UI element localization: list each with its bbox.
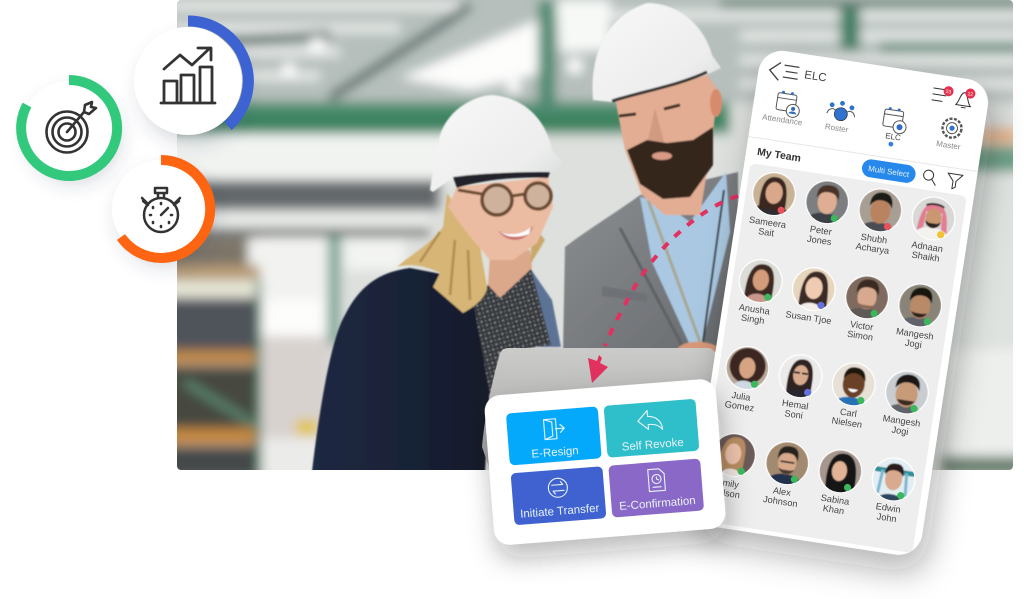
avatar: Emily Wilson — [720, 433, 756, 498]
avatar: Mangesh Jogi second: Jogi — [891, 425, 909, 437]
avatar: Hemal Soni — [778, 354, 822, 419]
button: E-Resign — [506, 406, 602, 465]
avatar: Victor Simon: Simon — [847, 329, 874, 343]
avatar: Sameera Sait — [749, 172, 796, 236]
avatar: Sabina Khan: Sabina — [820, 493, 851, 507]
avatar: Sameera Sait: Sait — [758, 226, 775, 238]
avatar: Julia Gomez: Gomez — [724, 399, 755, 413]
tab: Master — [936, 117, 965, 152]
avatar: Mangesh Jogi second: Mangesh — [882, 413, 921, 429]
avatar: Emily Wilson: Emily — [716, 477, 740, 490]
icon: filter — [946, 173, 963, 190]
icon: stopwatch — [142, 188, 180, 232]
button: Multi Select — [861, 158, 917, 184]
ring icon: stopwatch — [112, 160, 210, 258]
avatar: Peter Jones — [805, 180, 849, 245]
avatar: Carl Nielsen — [832, 362, 876, 428]
avatar: Alex Johnson: Johnson — [762, 494, 798, 509]
avatar: Anusha Singh: Singh — [740, 313, 765, 326]
avatar: Sameera Sait: Sameera — [748, 215, 788, 230]
ring icon: growth chart — [134, 21, 248, 135]
button: E-Confirmation — [608, 459, 704, 518]
avatar: Edwin John — [872, 458, 916, 522]
avatar: Carl Nielsen: Nielsen — [831, 415, 863, 430]
avatar: Anusha Singh: Anusha — [738, 302, 771, 317]
avatar: Emily Wilson: Wilson — [712, 486, 741, 500]
avatar: Carl Nielsen: Carl — [839, 407, 857, 419]
tab: Roster: Roster — [824, 122, 849, 135]
button: Self Revoke: Self Revoke — [621, 437, 684, 454]
photo background: blurred warehouse — [160, 0, 1024, 490]
photo: man in hard hat — [563, 3, 738, 352]
icon: back arrow — [637, 409, 663, 431]
photo: factory managers with hard hats — [160, 0, 1024, 490]
button: Multi Select: Multi Select — [868, 164, 911, 179]
phone header: back, menu, title: ELC — [803, 69, 827, 85]
avatar: Shubh Acharya: Shubh — [860, 232, 888, 246]
avatar: Susan Tjoe: Susan Tjoe — [785, 309, 832, 326]
avatar: Shubh Acharya: Acharya — [855, 241, 891, 256]
icon: swap arrows — [548, 478, 568, 498]
button: Initiate Transfer: Initiate Transfer — [520, 503, 600, 521]
avatar: Sabina Khan — [818, 450, 862, 514]
icon: bar chart with arrow — [161, 48, 215, 103]
tab: Master: Master — [936, 139, 961, 152]
avatar: Adnaan Shaikh: Shaikh — [911, 250, 940, 264]
avatar: Shubh Acharya — [856, 188, 902, 255]
avatar: Peter Jones: Jones — [806, 234, 833, 247]
notification icons with badges — [932, 83, 976, 109]
avatar: Hemal Soni: Hemal — [781, 398, 809, 412]
avatar: Edwin John: John — [876, 511, 897, 524]
avatar: Anusha Singh — [738, 259, 782, 325]
avatar: Julia Gomez: Julia — [731, 390, 752, 403]
avatar: Mangesh Jogi: Mangesh — [895, 326, 934, 342]
button: Self Revoke — [604, 399, 699, 458]
avatar: Mangesh Jogi second — [883, 370, 929, 436]
ring icon: target — [21, 80, 117, 176]
tab: Attendance: Attendance — [762, 112, 804, 127]
tab: Attendance — [762, 88, 807, 127]
avatar: Edwin John: Edwin — [875, 501, 901, 515]
phone: ELC app team screen — [689, 48, 991, 558]
dashed arrow from phone to action card — [588, 196, 738, 383]
icon: search — [922, 169, 937, 185]
tab: ELC active: ELC — [885, 131, 902, 143]
tab: Roster — [824, 99, 857, 135]
avatar: Hemal Soni: Soni — [784, 408, 804, 421]
avatar: Victor Simon — [845, 276, 889, 340]
avatar: Julia Gomez — [725, 346, 770, 412]
card: employee actions — [483, 378, 727, 546]
avatar: Alex Johnson: Alex — [772, 485, 792, 498]
icon: door exit — [543, 418, 565, 440]
notification icons with badges: 12 — [967, 91, 974, 98]
avatar: Mangesh Jogi: Jogi — [904, 338, 922, 350]
avatar: Adnaan Shaikh — [911, 196, 956, 262]
photo: laptop — [482, 348, 715, 470]
tab: ELC active — [880, 106, 909, 148]
avatar: Mangesh Jogi — [896, 284, 942, 350]
button: Initiate Transfer — [511, 466, 606, 525]
icon: document with clock — [648, 468, 665, 492]
avatar: Adnaan Shaikh: Adnaan — [911, 239, 944, 254]
avatar: Sabina Khan: Khan — [822, 503, 845, 516]
avatar: Alex Johnson — [763, 441, 809, 507]
avatar: Victor Simon: Victor — [849, 319, 874, 332]
heading: My Team: My Team — [756, 146, 802, 165]
button: E-Resign: E-Resign — [531, 445, 579, 461]
avatar: Peter Jones: Peter — [809, 224, 832, 237]
notification icons with badges: 23 — [945, 89, 952, 96]
icon: dartboard and arrow — [46, 102, 96, 152]
avatar: Susan Tjoe — [786, 267, 836, 324]
photo: woman in hard hat — [312, 95, 563, 472]
phone header: back, menu, title — [768, 61, 828, 87]
button: E-Confirmation: E-Confirmation — [619, 495, 696, 513]
